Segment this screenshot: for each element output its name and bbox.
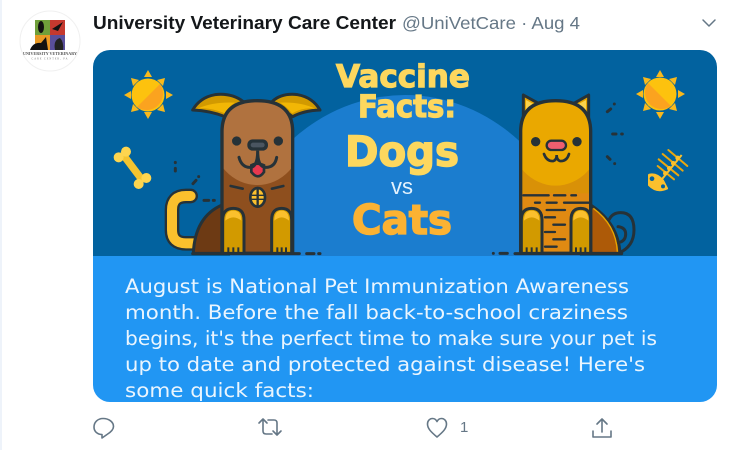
icon: like <box>428 418 446 437</box>
title: Vaccine Facts <box>335 62 470 118</box>
icon: reply <box>94 418 114 438</box>
body paragraph <box>125 275 657 402</box>
central blue arc <box>230 95 580 256</box>
avatar: clinic logo: UNIVERSITY VETERINARY <box>23 51 78 56</box>
body paragraph: August is National Pet Immunization Awareness <box>125 275 629 298</box>
icon: right sun <box>636 70 685 119</box>
body paragraph: month. Before the fall back-to-school craziness <box>125 301 628 324</box>
cat illustration <box>493 88 687 255</box>
icon: retweet <box>259 419 281 435</box>
icon: bone <box>114 147 151 189</box>
cat paws <box>521 208 591 253</box>
body paragraph: up to date and protected against disease! Here's <box>125 353 645 376</box>
dog illustration <box>114 88 320 255</box>
dog body and head <box>224 102 291 252</box>
cat ears <box>523 95 538 123</box>
icon: left sun <box>124 70 173 119</box>
cat haunch <box>591 205 620 253</box>
card text panel <box>93 256 717 402</box>
body paragraph: begins, it's the perfect time to make sure your pet is <box>125 327 657 350</box>
ground line <box>191 252 301 256</box>
dog paws <box>223 208 292 253</box>
dog haunch <box>193 205 222 253</box>
icon: chevron menu <box>703 20 715 26</box>
cat tail <box>609 213 634 253</box>
cat body and head <box>522 102 589 252</box>
cat face <box>531 137 540 146</box>
media card <box>93 50 717 402</box>
body paragraph: some quick facts: <box>125 379 314 402</box>
title: Dogs: Dogs <box>345 127 459 176</box>
cat stripes <box>523 195 589 247</box>
dog face <box>232 136 241 146</box>
dog ears <box>193 94 243 117</box>
icon: fish skeleton <box>649 150 687 190</box>
title: Cats: Cats <box>352 196 452 244</box>
header: account name: University Veterinary Care Center <box>93 13 396 33</box>
icon: share <box>593 419 611 437</box>
title: Vaccine Facts: Facts: <box>358 89 456 125</box>
header: handle and date: @UniVetCare · Aug 4 <box>402 13 580 33</box>
card banner background <box>93 50 717 256</box>
ground line <box>514 252 624 256</box>
dog collar and tag <box>231 186 283 207</box>
title: vs: vs <box>391 174 413 199</box>
title: Vaccine Facts: Vaccine <box>336 59 470 95</box>
avatar: clinic logo <box>20 11 80 71</box>
dog tail <box>172 196 197 243</box>
like count: 1 <box>460 419 468 436</box>
motion dashes <box>175 162 320 254</box>
motion dashes <box>493 104 622 253</box>
avatar: clinic logo: CARE CENTER, PA <box>31 58 69 60</box>
